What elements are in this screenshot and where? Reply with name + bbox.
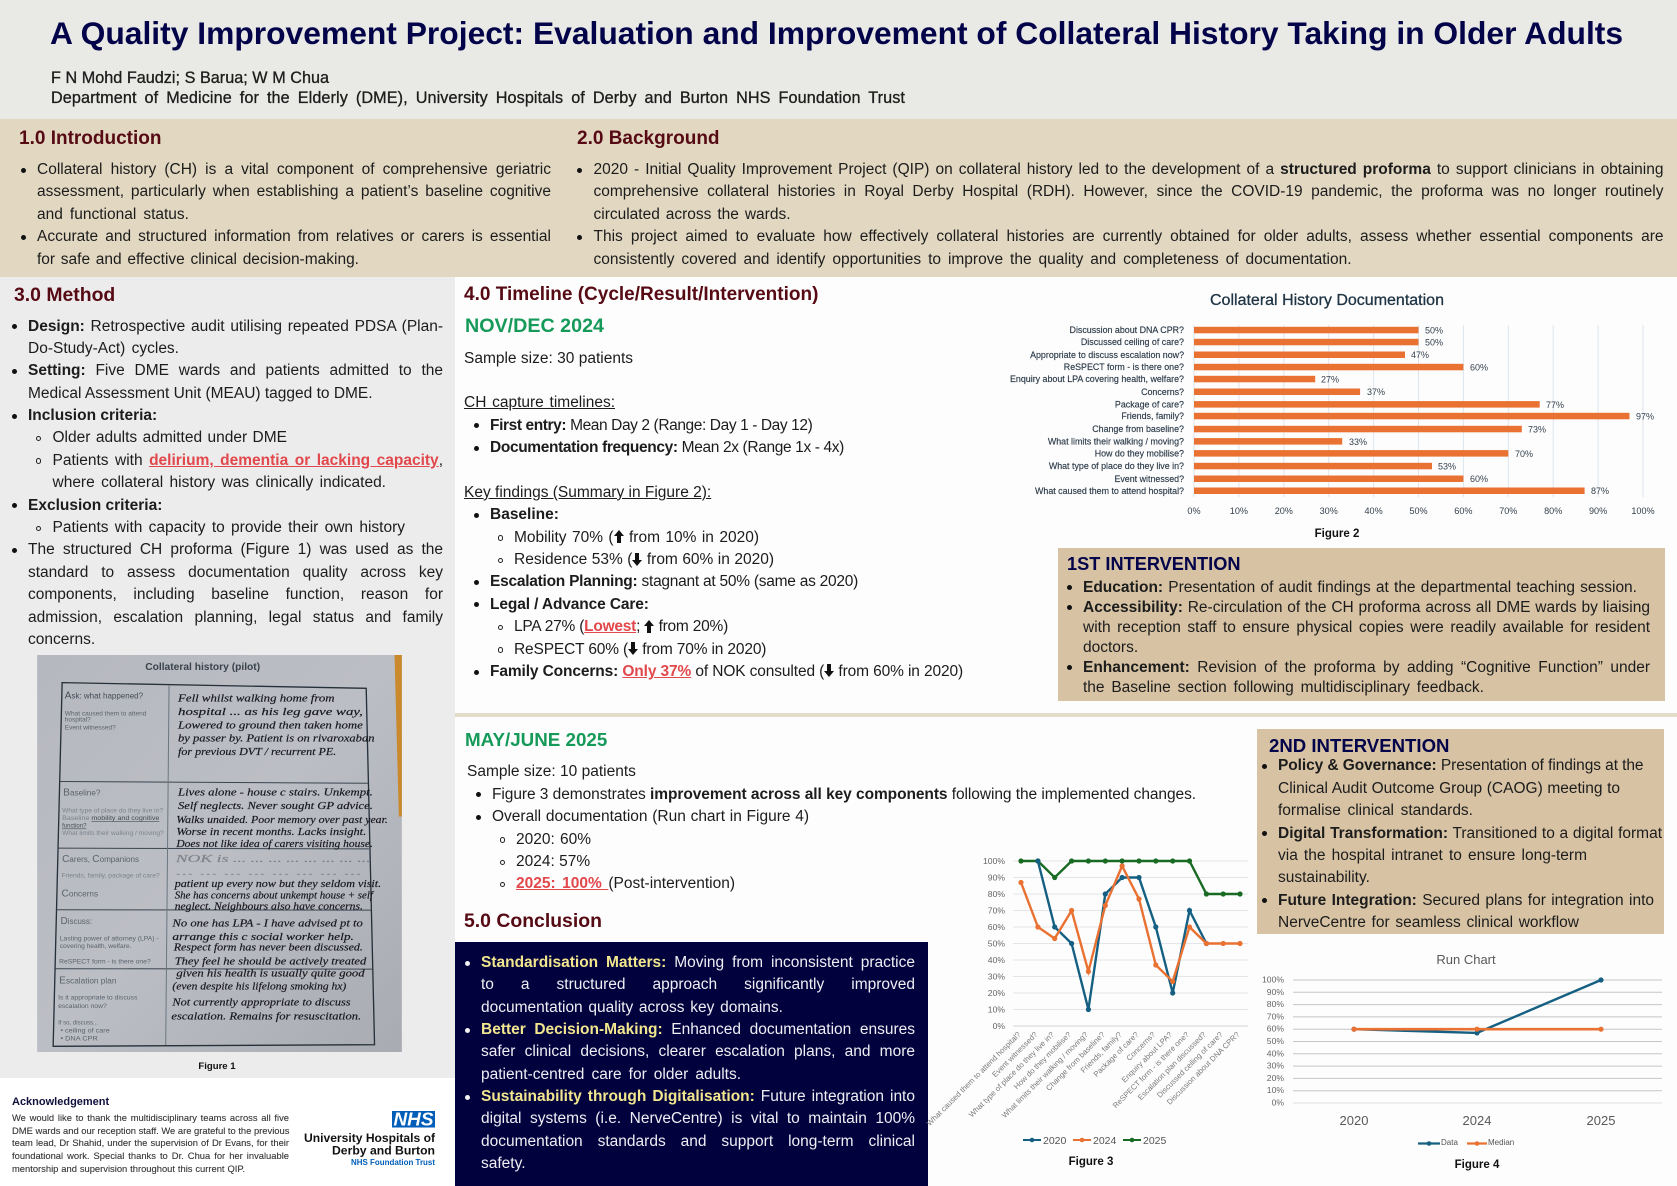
bullet: accessibility: with reception staff to ensure physical copies were readily available for resident xyxy=(1083,619,1650,636)
y axis labels: 60% xyxy=(1267,1024,1284,1034)
text block: acknowledgement: DME wards and our reception staff. We are grateful to the previous xyxy=(12,1125,289,1136)
value axis: 50% xyxy=(1409,506,1428,516)
bullet: proforma standard: admission, escalation planning, legal status and family xyxy=(28,609,443,626)
data labels: 50% xyxy=(1425,338,1443,348)
series: median xyxy=(1351,1027,1604,1032)
bullet: project aim: consistently covered and identify opportunities to improve the quality and completeness of documentation. xyxy=(594,251,1352,268)
handwritten notes: escalation. Remains for resuscitation. xyxy=(171,1012,361,1023)
heading: acknowledgement: Acknowledgement xyxy=(12,1096,109,1108)
category labels: Friends, family? xyxy=(1121,411,1184,421)
bullet: better decision-making: patient-centred care for older adults. xyxy=(481,1066,741,1083)
panel: introduction xyxy=(0,119,560,277)
bullet: sustainability: documentation standards and support long-term clinical xyxy=(481,1133,915,1150)
bullet: project aim: This project aimed to evaluate how effectively collateral histories are currently obtained for older adults, assess whether essential components are xyxy=(594,228,1664,245)
text block: first cycle findings xyxy=(464,350,963,680)
x axis labels: 2020 xyxy=(1340,1113,1368,1128)
handwritten notes: They feel he should be actively treated xyxy=(175,957,367,968)
chart: component comparison line chart xyxy=(925,856,1248,1147)
panel: acknowledgement xyxy=(12,1096,290,1174)
value axis: 10% xyxy=(1230,506,1248,516)
category labels: What type of place do they live in? xyxy=(1049,461,1184,471)
legend: Median xyxy=(1488,1138,1514,1147)
x axis labels: ReSPECT form - is there one? xyxy=(1111,1030,1191,1110)
bullet: proforma standard xyxy=(12,541,443,648)
x axis labels: 2024 xyxy=(1463,1113,1491,1128)
bullet: documentation frequency: Documentation frequency: Mean 2x (Range 1x - 4x) xyxy=(490,439,844,456)
panel: conclusion xyxy=(455,942,928,1186)
bullet: standardisation: documentation quality across key domains. xyxy=(481,999,783,1016)
x axis labels: Package of care? xyxy=(1092,1030,1140,1079)
logo: NHS University Hospitals of Derby and Burton xyxy=(304,1110,436,1167)
handwritten notes: Does not like idea of carers visiting house. xyxy=(175,839,373,850)
handwritten notes: Self neglects. Never sought GP advice. xyxy=(178,801,373,812)
panel: timeline xyxy=(455,277,1677,1186)
y axis labels: 0% xyxy=(1272,1098,1284,1108)
text block: second intervention xyxy=(1262,757,1662,931)
handwritten notes: given his health is usually quite good xyxy=(176,968,366,979)
y axis labels: 80% xyxy=(1267,999,1284,1009)
bullet: future integration xyxy=(1262,892,1654,931)
handwritten notes: Lives alone - house c stairs. Unkempt. xyxy=(177,788,373,799)
sub-bullet: 2020: 2020: 60% xyxy=(516,831,591,848)
proforma printed prompts: • ceiling of care xyxy=(60,1028,111,1034)
x axis labels: Enquiry about LPA? xyxy=(1120,1030,1174,1084)
bullet: enhancement xyxy=(1067,659,1650,696)
handwritten notes: No one has LPA - I have advised pt to xyxy=(171,918,363,929)
value axis xyxy=(1187,506,1655,516)
proforma printed prompts: Escalation plan xyxy=(59,975,117,986)
bullet: policy and governance: Policy & Governance: Presentation of findings at the xyxy=(1278,757,1643,774)
data labels: 60% xyxy=(1470,362,1488,372)
text block: acknowledgement: mentorship and supervision throughout this current QIP. xyxy=(12,1163,245,1174)
divider between cycles xyxy=(455,713,1677,717)
proforma printed prompts: What limits their walking / moving? xyxy=(62,831,164,837)
bullet: inclusion criteria: where collateral history was clinically indicated. xyxy=(52,474,386,491)
category labels: What caused them to attend hospital? xyxy=(1035,486,1184,496)
logo: NHS University Hospitals of Derby and Burton: NHS Foundation Trust xyxy=(351,1157,435,1167)
bullet: inclusion criteria: Inclusion criteria: xyxy=(28,407,157,424)
heading: method: 3.0 Method xyxy=(14,284,115,306)
x axis labels xyxy=(925,1030,1241,1128)
sub-bullet: ReSPECT: ReSPECT 60% ( from 70% in 2020) xyxy=(514,641,766,658)
x axis labels: Concerns? xyxy=(1125,1030,1157,1063)
data labels: 53% xyxy=(1438,462,1456,472)
proforma printed prompts: Event witnessed? xyxy=(65,725,116,731)
value axis: 80% xyxy=(1544,506,1562,516)
bullet: overall documentation: Overall documentation (Run chart in Figure 4) xyxy=(492,808,809,825)
bullet: policy and governance xyxy=(1262,757,1643,819)
proforma printed prompts: Baseline? xyxy=(63,788,101,799)
legend xyxy=(1023,1135,1167,1147)
handwritten notes: NOK is ... ... ... ... ... ... ... ... xyxy=(174,854,371,865)
handwritten notes: (even despite his lifelong smoking hx) xyxy=(172,982,347,993)
y axis labels: 10% xyxy=(988,1004,1005,1014)
text block: acknowledgement: team lead, Dr Shahid, under the supervision of Dr Evans, for their xyxy=(12,1137,289,1148)
bullet: escalation planning: Escalation Planning: stagnant at 50% (same as 2020) xyxy=(490,573,858,590)
bullet: collateral history xyxy=(21,161,551,223)
authors: F N Mohd Faudzi; S Barua; W M Chua xyxy=(51,69,329,87)
handwritten notes: by passer by. Patient is on rivaroxaban xyxy=(178,734,375,745)
category labels: Change from baseline? xyxy=(1092,424,1184,434)
data labels: 47% xyxy=(1411,350,1429,360)
category labels: Enquiry about LPA covering health, welfare? xyxy=(1010,374,1184,384)
x axis labels: 2025 xyxy=(1587,1113,1615,1128)
bullet: proforma standard: standard to assess documentation quality across key xyxy=(28,564,443,581)
bullet: future integration: Future Integration: Secured plans for integration into xyxy=(1278,892,1654,909)
bullet: initial project xyxy=(577,161,1664,223)
proforma printed prompts: If so, discuss... xyxy=(58,1020,98,1026)
series 2024 xyxy=(1018,863,1243,984)
bullet: design: Do-Study-Act) cycles. xyxy=(28,340,179,357)
icon: up arrow xyxy=(644,620,654,633)
x axis labels: What type of place do they live in? xyxy=(967,1030,1056,1119)
bullet: collateral history: Collateral history (CH) is a vital component of comprehensive geriatric xyxy=(37,161,551,178)
heading: background: 2.0 Background xyxy=(577,128,720,149)
y axis labels: 70% xyxy=(988,906,1005,916)
heading: conclusion: 5.0 Conclusion xyxy=(464,910,602,932)
text block: acknowledgement xyxy=(12,1112,290,1174)
handwritten notes: Walks unaided. Poor memory over past year. xyxy=(176,815,388,826)
chart: collateral history documentation xyxy=(1010,292,1655,516)
y axis labels: 10% xyxy=(1267,1085,1284,1095)
x axis labels: How do they mobilise? xyxy=(1012,1030,1073,1091)
series: data xyxy=(1351,977,1604,1036)
chart: run chart xyxy=(1262,952,1662,1147)
handwritten notes: hospital ... as his leg gave way, xyxy=(178,707,363,718)
bullet: setting: Setting: Five DME wards and patients admitted to the xyxy=(28,362,443,379)
proforma printed prompts: • DNA CPR xyxy=(60,1036,99,1042)
bullet: initial project: circulated across the wards. xyxy=(594,206,790,223)
bullet: better decision-making: safer clinical decisions, clearer escalation plans, and more xyxy=(481,1043,915,1060)
bullet: proforma standard: components, including baseline function, reason for xyxy=(28,586,443,603)
data labels: 73% xyxy=(1528,424,1546,434)
sub-bullet: 2024: 2024: 57% xyxy=(516,853,590,870)
sub-bullet: residence: Residence 53% ( from 60% in 2020) xyxy=(514,551,774,568)
y axis labels: 30% xyxy=(988,972,1005,982)
proforma printed prompts: Concerns xyxy=(61,888,98,899)
value axis: 20% xyxy=(1275,506,1293,516)
text block: first intervention xyxy=(1067,579,1650,696)
data labels: 33% xyxy=(1349,437,1367,447)
heading: second intervention: 2ND INTERVENTION xyxy=(1269,734,1449,756)
legend: 2025 xyxy=(1143,1135,1167,1147)
sub-bullet: mobility: Mobility 70% ( from 10% in 2020) xyxy=(514,529,759,546)
y axis labels: 70% xyxy=(1267,1011,1284,1021)
bullet: baseline: Baseline: xyxy=(490,506,559,523)
proforma printed prompts: Lasting power of attorney (LPA) - xyxy=(60,936,159,942)
bullet: proforma standard: concerns. xyxy=(28,631,95,648)
bars xyxy=(1194,327,1630,494)
bullet: digital transformation: Digital Transformation: Transitioned to a digital format xyxy=(1278,825,1662,842)
panel: background xyxy=(560,119,1677,277)
x axis labels xyxy=(1340,1113,1615,1128)
bullet: digital transformation: sustainability. xyxy=(1278,869,1370,886)
category labels: How do they mobilise? xyxy=(1095,448,1184,458)
y axis labels: 20% xyxy=(988,988,1005,998)
handwritten notes: Not currently appropriate to discuss xyxy=(171,998,351,1009)
bullet: initial project: 2020 - Initial Quality Improvement Project (QIP) on collateral history led to the development of a structured proforma to support clinicians in obtaining xyxy=(594,161,1663,178)
bullet: initial project: comprehensive collateral histories in Royal Derby Hospital (RDH). However, since the COVID-19 pandemic, the proforma was no longer routinely xyxy=(594,183,1664,200)
chart title: Run Chart xyxy=(1436,952,1496,967)
bullet: family concerns: Family Concerns: Only 37% of NOK consulted ( from 60% in 2020) xyxy=(490,663,963,680)
title: A Quality Improvement Project: Evaluation and Improvement of Collateral History Taking in Older Adults xyxy=(50,15,1623,51)
text block: acknowledgement: foundational work. Special thanks to Dr. Chua for her invaluable xyxy=(12,1150,289,1161)
proforma printed prompts: Ask: what happened? xyxy=(65,690,144,701)
data labels: 27% xyxy=(1321,374,1339,384)
bullet: exclusion criteria: Exclusion criteria: xyxy=(28,497,162,514)
proforma printed prompts: What type of place do they live in? xyxy=(62,809,164,815)
bullet: accurate information xyxy=(21,228,551,268)
bullet: accessibility: Accessibility: Re-circulation of the CH proforma across all DME wards by liaising xyxy=(1083,599,1650,616)
text block: method xyxy=(12,318,443,648)
sample size 2024: Sample size: 30 patients xyxy=(464,350,633,366)
series 2020 xyxy=(1035,858,1209,1012)
bullet: collateral history: assessment, particularly when establishing a patient’s baseline cognitive xyxy=(37,183,551,200)
y axis labels: 20% xyxy=(1267,1073,1284,1083)
y axis labels xyxy=(1262,974,1284,1108)
bullet: exclusion criteria xyxy=(12,497,405,536)
heading: introduction: 1.0 Introduction xyxy=(19,128,162,149)
bullet: exclusion criteria: Patients with capacity to provide their own history xyxy=(52,519,405,536)
proforma printed prompts: Discuss: xyxy=(60,916,92,927)
handwritten notes xyxy=(171,694,388,1023)
sub-bullet: LPA: LPA 27% (Lowest; from 20%) xyxy=(514,618,728,635)
bullet: enhancement: the Baseline section following multidisciplinary feedback. xyxy=(1083,679,1484,696)
bullet: figure 3 statement: Figure 3 demonstrates improvement across all key components following the implemented changes. xyxy=(492,786,1196,803)
value axis: 70% xyxy=(1499,506,1517,516)
value axis: 90% xyxy=(1589,506,1607,516)
data labels: 70% xyxy=(1515,449,1533,459)
caption: figure 1: Figure 1 xyxy=(198,1061,236,1072)
category labels: What limits their walking / moving? xyxy=(1048,436,1184,446)
category labels: Event witnessed? xyxy=(1114,474,1184,484)
icon: down arrow xyxy=(632,553,642,566)
bullet: collateral history: and functional status. xyxy=(37,206,189,223)
proforma printed prompts: Carers, Companions xyxy=(62,854,139,865)
bullet: sustainability: safety. xyxy=(481,1155,526,1172)
bullet: sustainability: digital systems (i.e. NerveCentre) is vital to maintain 100% xyxy=(481,1110,915,1127)
bullet: inclusion criteria xyxy=(12,407,443,491)
bullet: setting: Medical Assessment Unit (MEAU) tagged to DME. xyxy=(28,385,373,402)
value axis: 30% xyxy=(1320,506,1338,516)
bullet: standardisation: Standardisation Matters: Moving from inconsistent practice xyxy=(481,954,915,971)
category labels: ReSPECT form - is there one? xyxy=(1064,362,1184,372)
legend: 2020 xyxy=(1043,1135,1067,1147)
y axis labels: 100% xyxy=(983,856,1005,866)
logo: NHS University Hospitals of Derby and Burton: NHS xyxy=(394,1110,434,1130)
value axis: 100% xyxy=(1631,506,1655,516)
bullet: sustainability xyxy=(465,1088,915,1172)
x axis labels: Discussed ceiling of care? xyxy=(1155,1030,1225,1100)
handwritten notes: ... ... ... ... ... ... ... ... xyxy=(176,867,362,878)
handwritten notes: arrange this c social worker help. xyxy=(172,932,354,943)
bullet: first entry: First entry: Mean Day 2 (Range: Day 1 - Day 12) xyxy=(490,417,812,434)
x axis labels: What caused them to attend hospital? xyxy=(925,1030,1022,1128)
text block: background xyxy=(577,161,1664,268)
legend: Data xyxy=(1441,1138,1458,1147)
series 2025 xyxy=(1018,858,1243,897)
proforma table grid xyxy=(53,683,375,1046)
bullet: design: Design: Retrospective audit utilising repeated PDSA (Plan- xyxy=(28,318,443,334)
data labels: 97% xyxy=(1636,412,1654,422)
category labels: Appropriate to discuss escalation now? xyxy=(1030,350,1184,360)
bullet: inclusion criteria: Older adults admitted under DME xyxy=(52,429,287,446)
heading: first intervention: 1ST INTERVENTION xyxy=(1067,554,1240,574)
proforma printed prompts: Friends, family, package of care? xyxy=(61,873,160,879)
handwritten notes: Worse in recent months. Lacks insight. xyxy=(176,827,366,838)
x axis labels: Escalation plan discussed? xyxy=(1136,1030,1208,1102)
sample size 2025: Sample size: 10 patients xyxy=(467,763,636,780)
bullet: policy and governance: formalise clinical standards. xyxy=(1278,802,1473,819)
data labels: 87% xyxy=(1591,486,1609,496)
category labels: Discussed ceiling of care? xyxy=(1081,337,1184,347)
panel: method xyxy=(0,277,455,1078)
chart title: Collateral History Documentation xyxy=(1210,292,1444,309)
handwritten notes: neglect. Neighbours also have concerns. xyxy=(175,901,363,912)
caption: figure 4: Figure 4 xyxy=(1455,1159,1499,1171)
heading: timeline: 4.0 Timeline (Cycle/Result/Intervention) xyxy=(464,284,818,305)
subheading: key findings: Key findings (Summary in Figure 2): xyxy=(464,484,711,501)
x axis labels: Event witnessed? xyxy=(990,1030,1039,1079)
y axis labels xyxy=(983,856,1005,1031)
text block: introduction xyxy=(21,161,551,268)
bullet: accessibility xyxy=(1067,599,1650,656)
handwritten notes: Respect form has never been discussed. xyxy=(173,943,363,954)
bullet: education: Education: Presentation of audit findings at the departmental teaching session. xyxy=(1083,579,1637,596)
panel: first intervention xyxy=(1058,548,1665,701)
y axis labels: 30% xyxy=(1267,1061,1284,1071)
bullet: standardisation: to a structured approach significantly improved xyxy=(481,976,915,993)
data labels xyxy=(1321,326,1654,496)
heading: Nov/Dec 2024: NOV/DEC 2024 xyxy=(465,314,604,336)
bullet: project aim xyxy=(577,228,1664,268)
bullet: better decision-making xyxy=(465,1021,915,1083)
y axis labels: 50% xyxy=(988,938,1005,948)
heading: May/June 2025: MAY/JUNE 2025 xyxy=(465,729,607,750)
y axis labels: 40% xyxy=(988,955,1005,965)
caption: figure 2: Figure 2 xyxy=(1315,528,1359,540)
proforma printed prompts xyxy=(58,690,164,1042)
legend xyxy=(1418,1138,1514,1147)
category labels xyxy=(1010,325,1184,496)
y axis labels: 50% xyxy=(1267,1036,1284,1046)
handwritten notes: for previous DVT / recurrent PE. xyxy=(178,747,336,758)
bullet: accessibility: doctors. xyxy=(1083,639,1138,656)
icon: down arrow xyxy=(628,642,638,655)
handwritten notes: Fell whilst walking home from xyxy=(177,694,335,705)
proforma printed prompts: Baseline mobility and cognitive xyxy=(62,816,160,822)
bullet: accurate information: Accurate and structured information from relatives or carers is essential xyxy=(37,228,551,245)
bullet: setting xyxy=(12,362,443,402)
proforma printed prompts: escalation now? xyxy=(58,1004,108,1010)
bullet: future integration: NerveCentre for seamless clinical workflow xyxy=(1278,914,1579,931)
y axis labels: 90% xyxy=(988,872,1005,882)
icon: up arrow xyxy=(614,530,624,543)
y axis labels: 0% xyxy=(993,1021,1005,1031)
y axis labels: 40% xyxy=(1267,1048,1284,1058)
bullet: accurate information: for safe and effective clinical decision-making. xyxy=(37,251,359,268)
caption: figure 3: Figure 3 xyxy=(1069,1156,1113,1168)
x axis labels: Friends, family? xyxy=(1079,1030,1124,1075)
bullet: enhancement: Enhancement: Revision of the proforma by adding “Cognitive Function” under xyxy=(1083,659,1650,676)
bullet: inclusion criteria: Patients with delirium, dementia or lacking capacity, xyxy=(52,452,443,469)
text block: acknowledgement: We would like to thank the multidisciplinary teams across all five xyxy=(12,1112,289,1123)
bullet: legal and advance care: Legal / Advance Care: xyxy=(490,596,649,613)
handwritten notes: Lowered to ground then taken home xyxy=(177,720,364,731)
proforma printed prompts: covering health, welfare. xyxy=(60,944,132,950)
proforma printed prompts: ReSPECT form - is there one? xyxy=(59,960,151,966)
category labels: Concerns? xyxy=(1141,387,1184,397)
proforma printed prompts: function? xyxy=(62,824,87,830)
bullet: proforma standard: The structured CH proforma (Figure 1) was used as the xyxy=(28,541,443,558)
data labels: 77% xyxy=(1546,400,1564,410)
figure 1: collateral history proforma photo: Collateral history (pilot) xyxy=(145,662,260,673)
bullet: digital transformation: via the hospital intranet to ensure long-term xyxy=(1278,847,1587,864)
text block: conclusion xyxy=(465,954,915,1172)
bullet: policy and governance: Clinical Audit Outcome Group (CAOG) meeting to xyxy=(1278,780,1620,797)
category labels: Package of care? xyxy=(1115,400,1184,410)
logo: NHS University Hospitals of Derby and Burton: Derby and Burton xyxy=(332,1144,435,1158)
text block: second cycle results xyxy=(467,763,1196,892)
header band xyxy=(0,0,1677,119)
value axis: 0% xyxy=(1187,506,1201,516)
department: Department of Medicine for the Elderly (DME), University Hospitals of Derby and Burton NHS Foundation Trust xyxy=(51,89,905,107)
y axis labels: 60% xyxy=(988,922,1005,932)
value axis: 40% xyxy=(1364,506,1383,516)
proforma printed prompts: What caused them to attend xyxy=(65,711,146,717)
subheading: CH capture timelines: CH capture timelines: xyxy=(464,394,615,411)
y axis labels: 90% xyxy=(1267,987,1284,997)
x axis labels: Discussion about DNA CPR? xyxy=(1165,1030,1241,1107)
data labels: 50% xyxy=(1425,326,1443,336)
icon: down arrow xyxy=(824,664,834,677)
bullet: standardisation xyxy=(465,954,915,1016)
bullet: better decision-making: Better Decision-Making: Enhanced documentation ensures xyxy=(481,1021,915,1038)
panel: second intervention xyxy=(1257,729,1664,934)
handwritten notes: She has concerns about unkempt house + self xyxy=(175,890,374,901)
proforma printed prompts: hospital? xyxy=(65,717,91,723)
x axis labels: What limits their walking / moving? xyxy=(1000,1030,1090,1120)
value axis: 60% xyxy=(1454,506,1473,516)
y axis labels: 80% xyxy=(988,889,1005,899)
logo: NHS University Hospitals of Derby and Burton: University Hospitals of xyxy=(304,1131,436,1145)
category labels: Discussion about DNA CPR? xyxy=(1070,325,1184,335)
bullet: design xyxy=(12,318,443,357)
data labels: 60% xyxy=(1470,474,1488,484)
y axis labels: 100% xyxy=(1262,974,1284,984)
figure 1: collateral history proforma photo xyxy=(37,655,402,1052)
sub-bullet: 2025: 2025: 100% (Post-intervention) xyxy=(516,875,735,892)
bullet: digital transformation xyxy=(1262,825,1662,886)
legend: 2024 xyxy=(1093,1135,1117,1147)
data labels: 37% xyxy=(1367,387,1385,397)
proforma printed prompts: Is it appropriate to discuss xyxy=(58,996,137,1002)
bullet: sustainability: Sustainability through Digitalisation: Future integration into xyxy=(481,1088,915,1105)
handwritten notes: patient up every now but they seldom visit. xyxy=(173,879,381,890)
x axis labels: Change from baseline? xyxy=(1044,1030,1107,1093)
